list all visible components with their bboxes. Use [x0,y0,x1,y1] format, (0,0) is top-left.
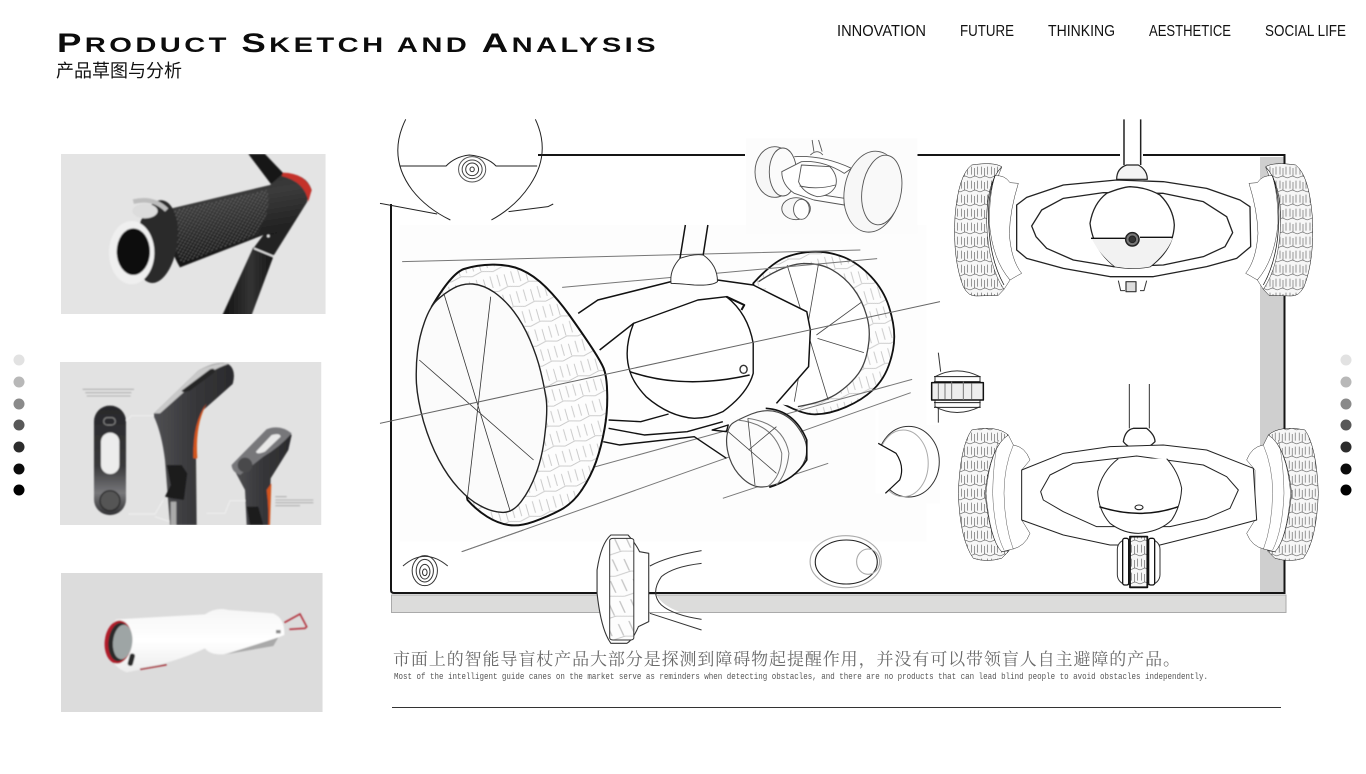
navigation: SOCIAL LIFE [1265,23,1346,40]
bottom sketches [403,530,881,643]
side caster sketch [932,353,983,423]
neck and knob [680,225,708,258]
big wheel [416,265,607,525]
side wheel elevation [597,535,702,643]
small front wheel [727,408,807,487]
guide lines [402,250,912,552]
photo: handle design sheet [60,362,321,525]
rear view [958,384,1318,587]
callout leader lines [124,414,246,522]
main perspective sketch [380,119,940,552]
wheel outline circle [810,536,881,588]
title: P RODUCT S KETCH AND A NALYSIS [57,28,659,58]
top view [955,119,1313,296]
navigation: FUTURE [960,23,1014,40]
chinese description: 市面上的智能导盲杖产品大部分是探测到障碍物起提醒作用，并没有可以带领盲人自主避障的产品。 [393,649,1180,669]
sphere [627,297,753,418]
navigation: AESTHETICE [1149,23,1231,40]
navigation [837,23,1346,40]
camera detail circle [380,119,553,220]
left dot indicator [14,354,24,496]
bottom rule [392,707,1281,708]
side wheel detail [876,410,940,503]
top-view and rear-view sketches [932,119,1318,587]
bottom shadow strip [392,595,1286,612]
rear caster [1117,537,1160,587]
small perspective thumbnail [746,138,917,236]
body [578,225,810,458]
right shadow strip [1260,157,1284,593]
sketch frame [391,155,1286,612]
photo: white cane handle [61,573,323,712]
annotation text lines [83,389,313,506]
right wheel [753,252,894,414]
subtitle: 产品草图与分析 [56,61,182,81]
navigation: THINKING [1048,23,1115,40]
axis line [380,302,940,423]
sketch backdrop [400,225,926,542]
navigation: INNOVATION [837,23,926,40]
right dot indicator [1340,354,1352,496]
front eye detail [403,530,524,586]
photo: black grip handle [61,154,326,317]
